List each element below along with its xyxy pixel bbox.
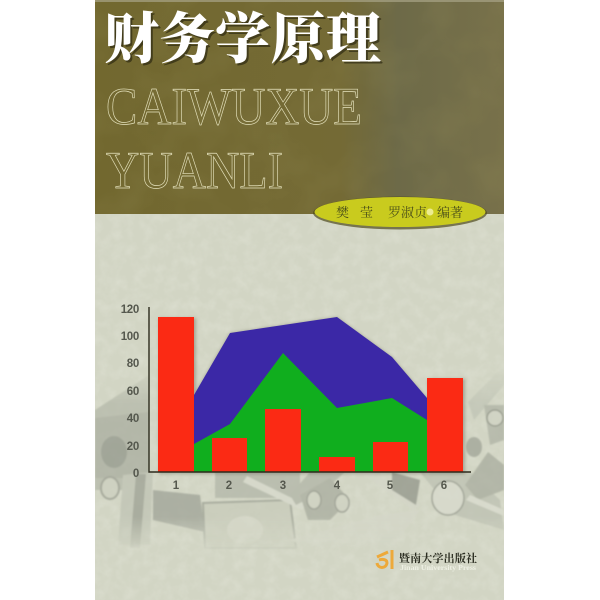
publisher name: 暨南大学出版社 [399, 551, 477, 565]
y axis labels: 120 [121, 304, 139, 316]
dollar bills background [95, 365, 504, 548]
y axis labels: 60 [127, 386, 139, 398]
author badge [313, 196, 487, 230]
blue area series [194, 317, 427, 472]
y axis labels: 80 [127, 358, 139, 370]
red bars [158, 317, 463, 472]
x axis labels: 4 [334, 480, 341, 492]
y axis labels: 0 [133, 468, 139, 480]
author badge: 莹 [360, 205, 373, 220]
green area series [194, 353, 427, 472]
chart shadow [159, 317, 465, 474]
y axis labels: 20 [127, 441, 139, 453]
x axis labels [173, 480, 447, 492]
book cover [95, 0, 504, 600]
subtitle: YUANLI: YUANLI [106, 142, 283, 200]
panel: lower paper background [95, 214, 504, 600]
author badge: 樊 [336, 205, 349, 220]
x axis labels: 1 [173, 480, 180, 492]
x axis labels: 5 [387, 480, 394, 492]
publisher name: Jinan University Press [400, 563, 476, 572]
title: 财务学原理 [104, 9, 381, 70]
axes [149, 307, 471, 472]
publisher name [399, 551, 477, 572]
author badge: 编著 [437, 205, 463, 220]
x axis labels: 3 [280, 480, 286, 492]
publisher logo [377, 550, 392, 569]
author badge: 罗淑贞 [388, 205, 427, 220]
y axis labels: 100 [121, 331, 139, 343]
panel: olive title band [95, 0, 504, 214]
chart [121, 304, 471, 492]
y axis labels: 40 [127, 413, 139, 425]
y axis labels [121, 304, 139, 480]
title: 财务学原理 [106, 11, 383, 72]
x axis labels: 6 [441, 480, 447, 492]
x axis labels: 2 [226, 480, 232, 492]
subtitle: CAIWUXUE: CAIWUXUE [106, 78, 362, 136]
